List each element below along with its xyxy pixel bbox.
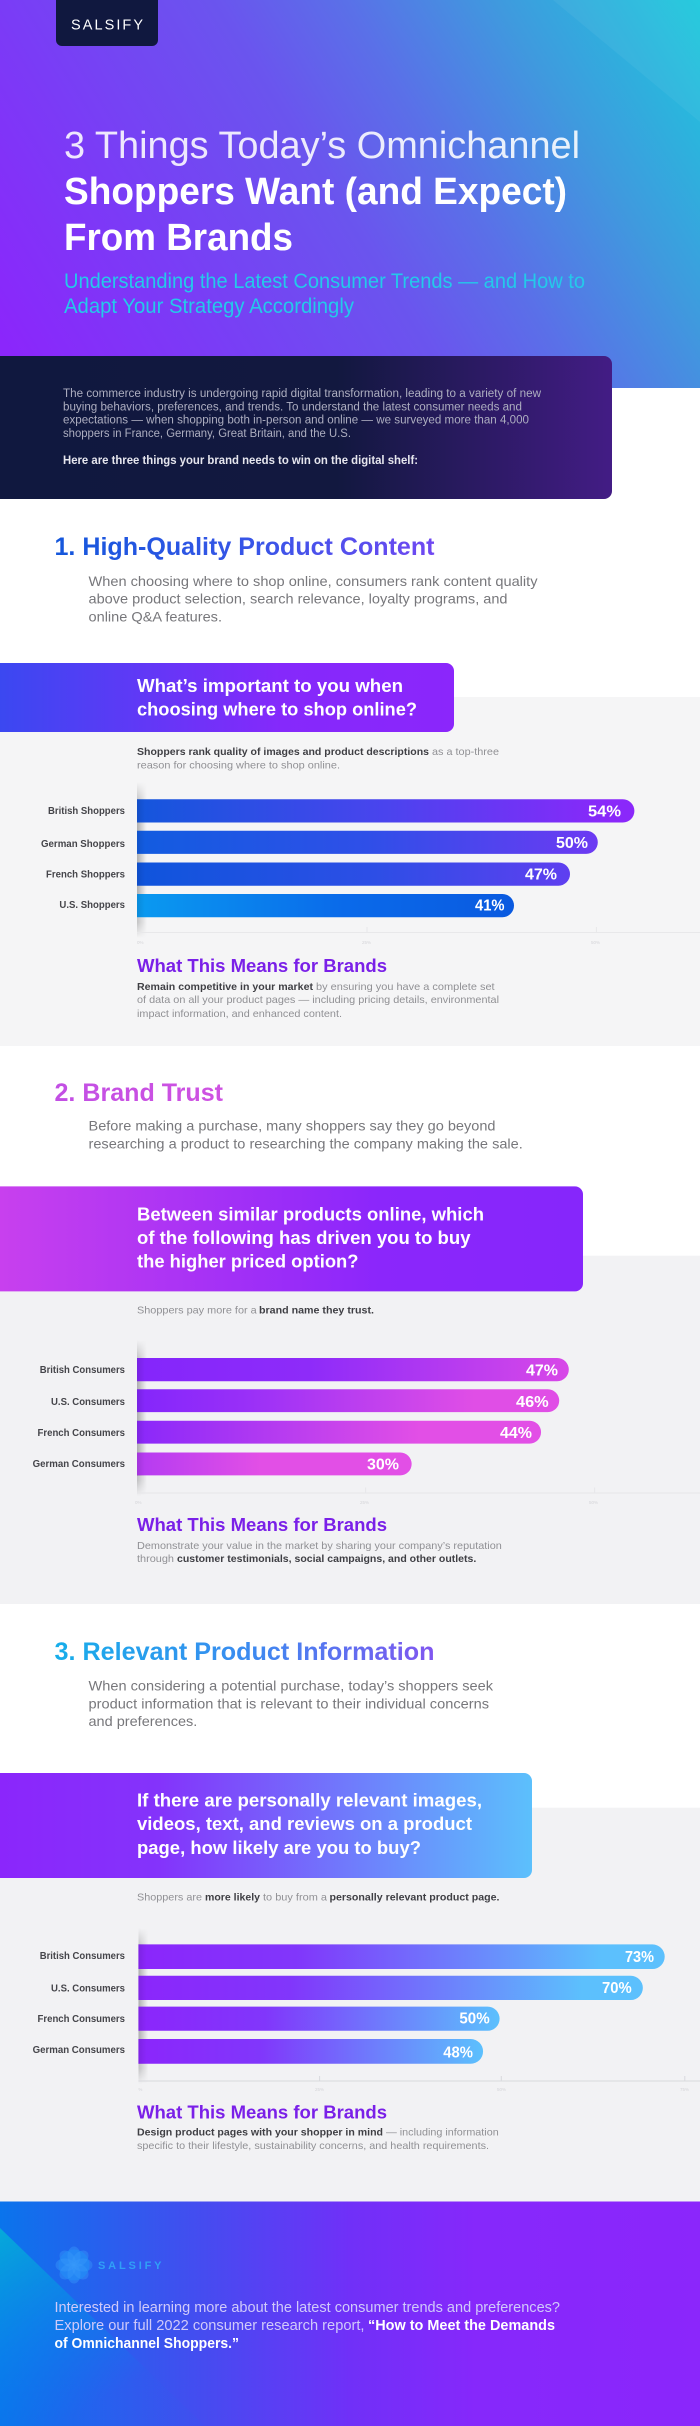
intro text: The commerce industry is undergoing rapid digital transformation, leading to a variety of new [63,388,542,400]
chart 3 caption [137,1892,500,1904]
what this means 2: customer testimonials, social campaigns, and other outlets. [177,1553,476,1565]
what this means 1: of data on all your product pages — including pricing details, environmental [137,994,499,1006]
bar: German Shoppers 50% [41,831,598,854]
bar: British Consumers 73% [40,1944,665,1969]
logo badge [56,0,158,46]
section 2 heading: 2. Brand Trust [54,1079,224,1107]
bar: German Shoppers 50%: German Shoppers [41,839,125,850]
question banner 1: choosing where to shop online? [137,699,417,720]
chart 3 caption: personally relevant product page. [330,1892,500,1904]
footer panel [0,2202,700,2426]
bar: French Shoppers 47%: 47% [525,866,557,883]
bar: British Consumers 47% [40,1358,569,1381]
bar chart 3: 50% [497,2087,506,2092]
bar: German Consumers 30%: 30% [367,1457,399,1474]
title [64,125,580,259]
bar chart 1: 25% [362,940,371,945]
what this means 2: What This Means for Brands [137,1514,387,1535]
intro text: expectations — when shopping both in-person and online — we surveyed more than 4,000 [63,414,529,426]
hero panel [0,0,700,388]
footer text: “How to Meet the Demands [368,2317,555,2334]
bar: U.S. Shoppers 41% [59,894,514,917]
logo badge: SALSIFY [71,18,143,34]
section 1 description: online Q&A features. [88,608,222,624]
section 3 heading: 3. Relevant Product Information [54,1638,434,1666]
what this means 3: specific to their lifestyle, sustainability concerns, and health requirements. [137,2140,489,2152]
chart 2 caption: Shoppers pay more for a [137,1305,257,1317]
bar chart 2: 25% [360,1500,369,1505]
section 3 description: and preferences. [88,1713,197,1729]
bar: British Shoppers 54% [48,799,634,822]
panel: section 2 chart background [0,1256,700,1604]
what this means 1: What This Means for Brands [137,955,387,976]
bar: British Consumers 73%: 73% [625,1949,654,1966]
footer text: of Omnichannel Shoppers.” [54,2335,239,2352]
bar: German Shoppers 50%: 50% [556,835,588,852]
subtitle [64,270,585,318]
what this means 3: — including information [386,2127,499,2139]
bar chart 3: % [138,2087,142,2092]
intro panel [0,356,612,499]
question banner 3: page, how likely are you to buy? [137,1837,421,1858]
bar: British Shoppers 54%: British Shoppers [48,806,125,817]
chart 3 caption: more likely [205,1892,260,1904]
bar: U.S. Shoppers 41%: 41% [475,898,505,915]
title: From Brands [64,217,293,259]
what this means 3: Design product pages with your shopper in mind [137,2127,383,2139]
what this means 1: impact information, and enhanced content. [137,1008,342,1020]
question banner 2 [0,1186,583,1291]
what this means 1: by ensuring you have a complete set [316,981,495,993]
question banner 2: the higher priced option? [137,1250,358,1272]
bar: British Consumers 47%: 47% [526,1363,558,1380]
section 3 description: product information that is relevant to their individual concerns [88,1695,489,1711]
question banner 2: of the following has driven you to buy [137,1227,471,1248]
subtitle: Understanding the Latest Consumer Trends — and How to [64,270,585,293]
bar: German Consumers 30% [33,1452,412,1475]
bar: U.S. Consumers 70%: U.S. Consumers [51,1984,125,1995]
intro text [63,388,542,467]
intro text: shoppers in France, Germany, Great Britain, and the U.S. [63,428,351,440]
chart 3 caption: Shoppers are [137,1892,202,1904]
bar chart 1: 50% [591,940,600,945]
bar: French Consumers 50% [38,2007,500,2031]
bar: U.S. Consumers 46%: 46% [516,1394,549,1411]
what this means 3 [137,2102,499,2152]
section 2 description [88,1118,523,1152]
icon: salsify flower logo [56,2246,92,2284]
question banner 3 [0,1773,532,1878]
section 2 description: Before making a purchase, many shoppers say they go beyond [88,1118,495,1134]
bar: German Consumers 48% [33,2039,483,2064]
section 3 description: When considering a potential purchase, today’s shoppers seek [88,1677,494,1693]
chart 1 caption: as a top-three [432,746,499,758]
bar chart 3: 75% [680,2087,689,2092]
footer logo wordmark: SALSIFY [98,2260,162,2272]
question banner 1: What’s important to you when [137,675,403,696]
bar: French Shoppers 47% [46,862,570,886]
bar: British Shoppers 54%: 54% [588,803,621,820]
subtitle: Adapt Your Strategy Accordingly [64,295,354,318]
section 3 description [88,1677,494,1729]
bar: German Consumers 30%: German Consumers [33,1459,125,1470]
bar: British Consumers 47%: British Consumers [40,1365,125,1376]
chart 1 caption: reason for choosing where to shop online. [137,760,340,772]
section 1 heading: 1. High-Quality Product Content [54,533,435,561]
bar: French Consumers 44%: 44% [500,1425,532,1442]
footer text: Interested in learning more about the latest consumer trends and preferences? [54,2299,560,2316]
bar chart 2 [33,1340,700,1505]
question banner 1 [0,663,454,732]
bar: British Consumers 73%: British Consumers [40,1951,125,1962]
what this means 2 [137,1514,502,1565]
footer text: Explore our full 2022 consumer research report, [54,2317,364,2334]
bar: French Consumers 50%: French Consumers [38,2014,125,2025]
bar: U.S. Shoppers 41%: U.S. Shoppers [59,900,125,911]
intro text: buying behaviors, preferences, and trends. To understand the latest consumer needs and [63,402,522,414]
what this means 2: through [137,1553,174,1565]
bar: U.S. Consumers 70% [51,1976,643,2000]
question banner 3: videos, text, and reviews on a product [137,1813,472,1834]
section 1 description: above product selection, search relevance, loyalty programs, and [88,591,508,607]
section 2 description: researching a product to researching the company making the sale. [88,1136,523,1152]
bar: French Consumers 50%: 50% [459,2011,490,2028]
what this means 2: Demonstrate your value in the market by sharing your company’s reputation [137,1540,502,1552]
bar chart 2: 50% [589,1500,598,1505]
bar: French Consumers 44%: French Consumers [38,1428,125,1439]
question banner 3: If there are personally relevant images, [137,1790,482,1811]
bar chart 3: 25% [315,2087,324,2092]
title: Shoppers Want (and Expect) [64,171,567,213]
footer text [54,2299,560,2352]
chart 1 caption: Shoppers rank quality of images and product descriptions [137,746,429,758]
panel: section 3 chart background [0,1808,700,2202]
title: 3 Things Today’s Omnichannel [64,125,580,167]
question banner 2: Between similar products online, which [137,1203,484,1224]
what this means 1: Remain competitive in your market [137,981,313,993]
panel: section 1 chart background [0,697,700,1046]
bar: U.S. Consumers 70%: 70% [602,1980,632,1997]
bar chart 2: 0% [135,1500,142,1505]
chart 1 caption [137,746,499,772]
chart 2 caption: brand name they trust. [259,1305,374,1317]
chart 3 caption: to buy from a [263,1892,327,1904]
bar chart 3 [33,1928,700,2092]
intro text: Here are three things your brand needs to win on the digital shelf: [63,455,418,467]
what this means 1 [137,955,499,1020]
bar: U.S. Consumers 46% [51,1389,559,1412]
bar chart 1 [41,782,700,945]
what this means 3: What This Means for Brands [137,2102,387,2123]
bar chart 1: 0% [137,940,144,945]
bar: German Consumers 48%: 48% [443,2044,473,2062]
bar: French Shoppers 47%: French Shoppers [46,870,125,880]
section 1 description [88,573,538,624]
bar: French Consumers 44% [38,1421,541,1444]
section 1 description: When choosing where to shop online, consumers rank content quality [88,573,538,589]
bar: German Consumers 48%: German Consumers [33,2045,125,2056]
chart 2 caption [137,1305,374,1317]
bar: U.S. Consumers 46%: U.S. Consumers [51,1397,125,1408]
